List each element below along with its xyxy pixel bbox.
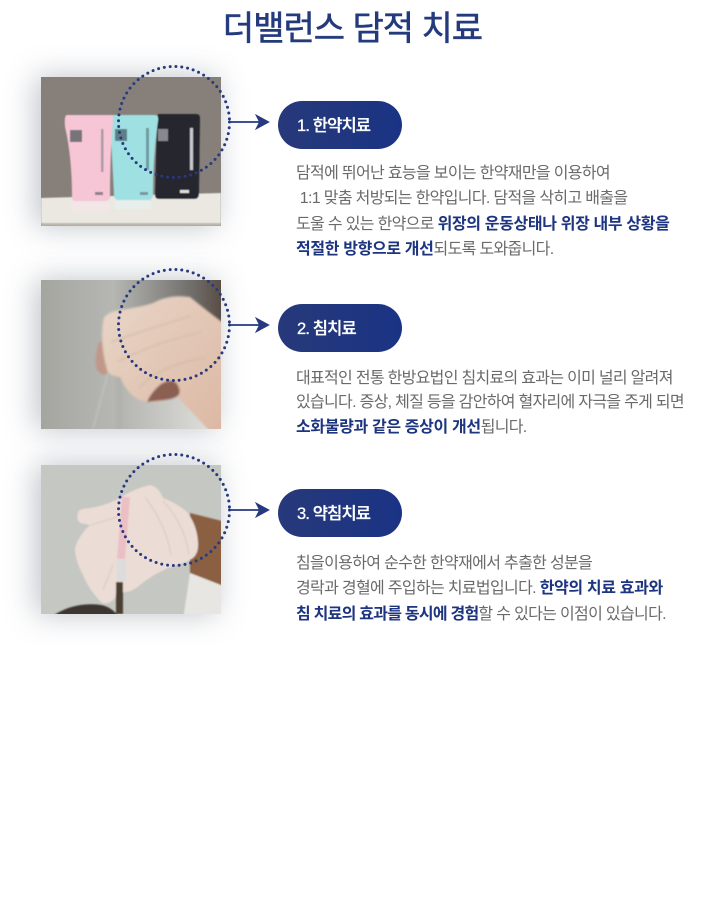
text block 2: 소화불량과 같은 증상이 개선됩니다. [296,419,527,436]
text block 3 [296,554,666,623]
text block 2 [296,370,684,436]
callout circle and arrow 3 [117,453,270,567]
text block 3: 침을이용하여 순수한 한약재에서 추출한 성분을 [296,555,592,572]
callout circle and arrow 2 [117,268,270,382]
text block 2: 있습니다. 증상, 체질 등을 감안하여 혈자리에 자극을 주게 되면 [296,394,684,411]
photo: herbal medicine pouches [41,77,221,226]
photo: gloved hand with syringe [41,465,221,614]
photo: hand holding acupuncture needle [41,280,221,429]
badge: 3. 약침치료 [278,489,402,537]
text block 1: 담적에 뛰어난 효능을 보이는 한약재만을 이용하여 [296,165,610,182]
badge: 2. 침치료 [278,304,402,352]
badge: 2. 침치료: 2. 침치료 [297,320,356,338]
text block 3: 경락과 경혈에 주입하는 치료법입니다. 한약의 치료 효과와 [296,580,663,597]
badge: 1. 한약치료 [278,101,402,149]
text block 1 [296,164,670,258]
text block 1: 적절한 방향으로 개선되도록 도와줍니다. [296,241,553,258]
text block 1: 1:1 맞춤 처방되는 한약입니다. 담적을 삭히고 배출을 [300,190,627,207]
badge: 3. 약침치료: 3. 약침치료 [297,505,370,523]
text block 2: 대표적인 전통 한방요법인 침치료의 효과는 이미 널리 알려져 [296,370,673,387]
badge: 1. 한약치료: 1. 한약치료 [297,117,370,135]
text block 1: 도울 수 있는 한약으로 위장의 운동상태나 위장 내부 상황을 [296,216,670,233]
text block 3: 침 치료의 효과를 동시에 경험할 수 있다는 이점이 있습니다. [296,606,666,623]
callout circle and arrow 1 [117,65,270,179]
title: 더밸런스 담적 치료 [223,10,482,48]
